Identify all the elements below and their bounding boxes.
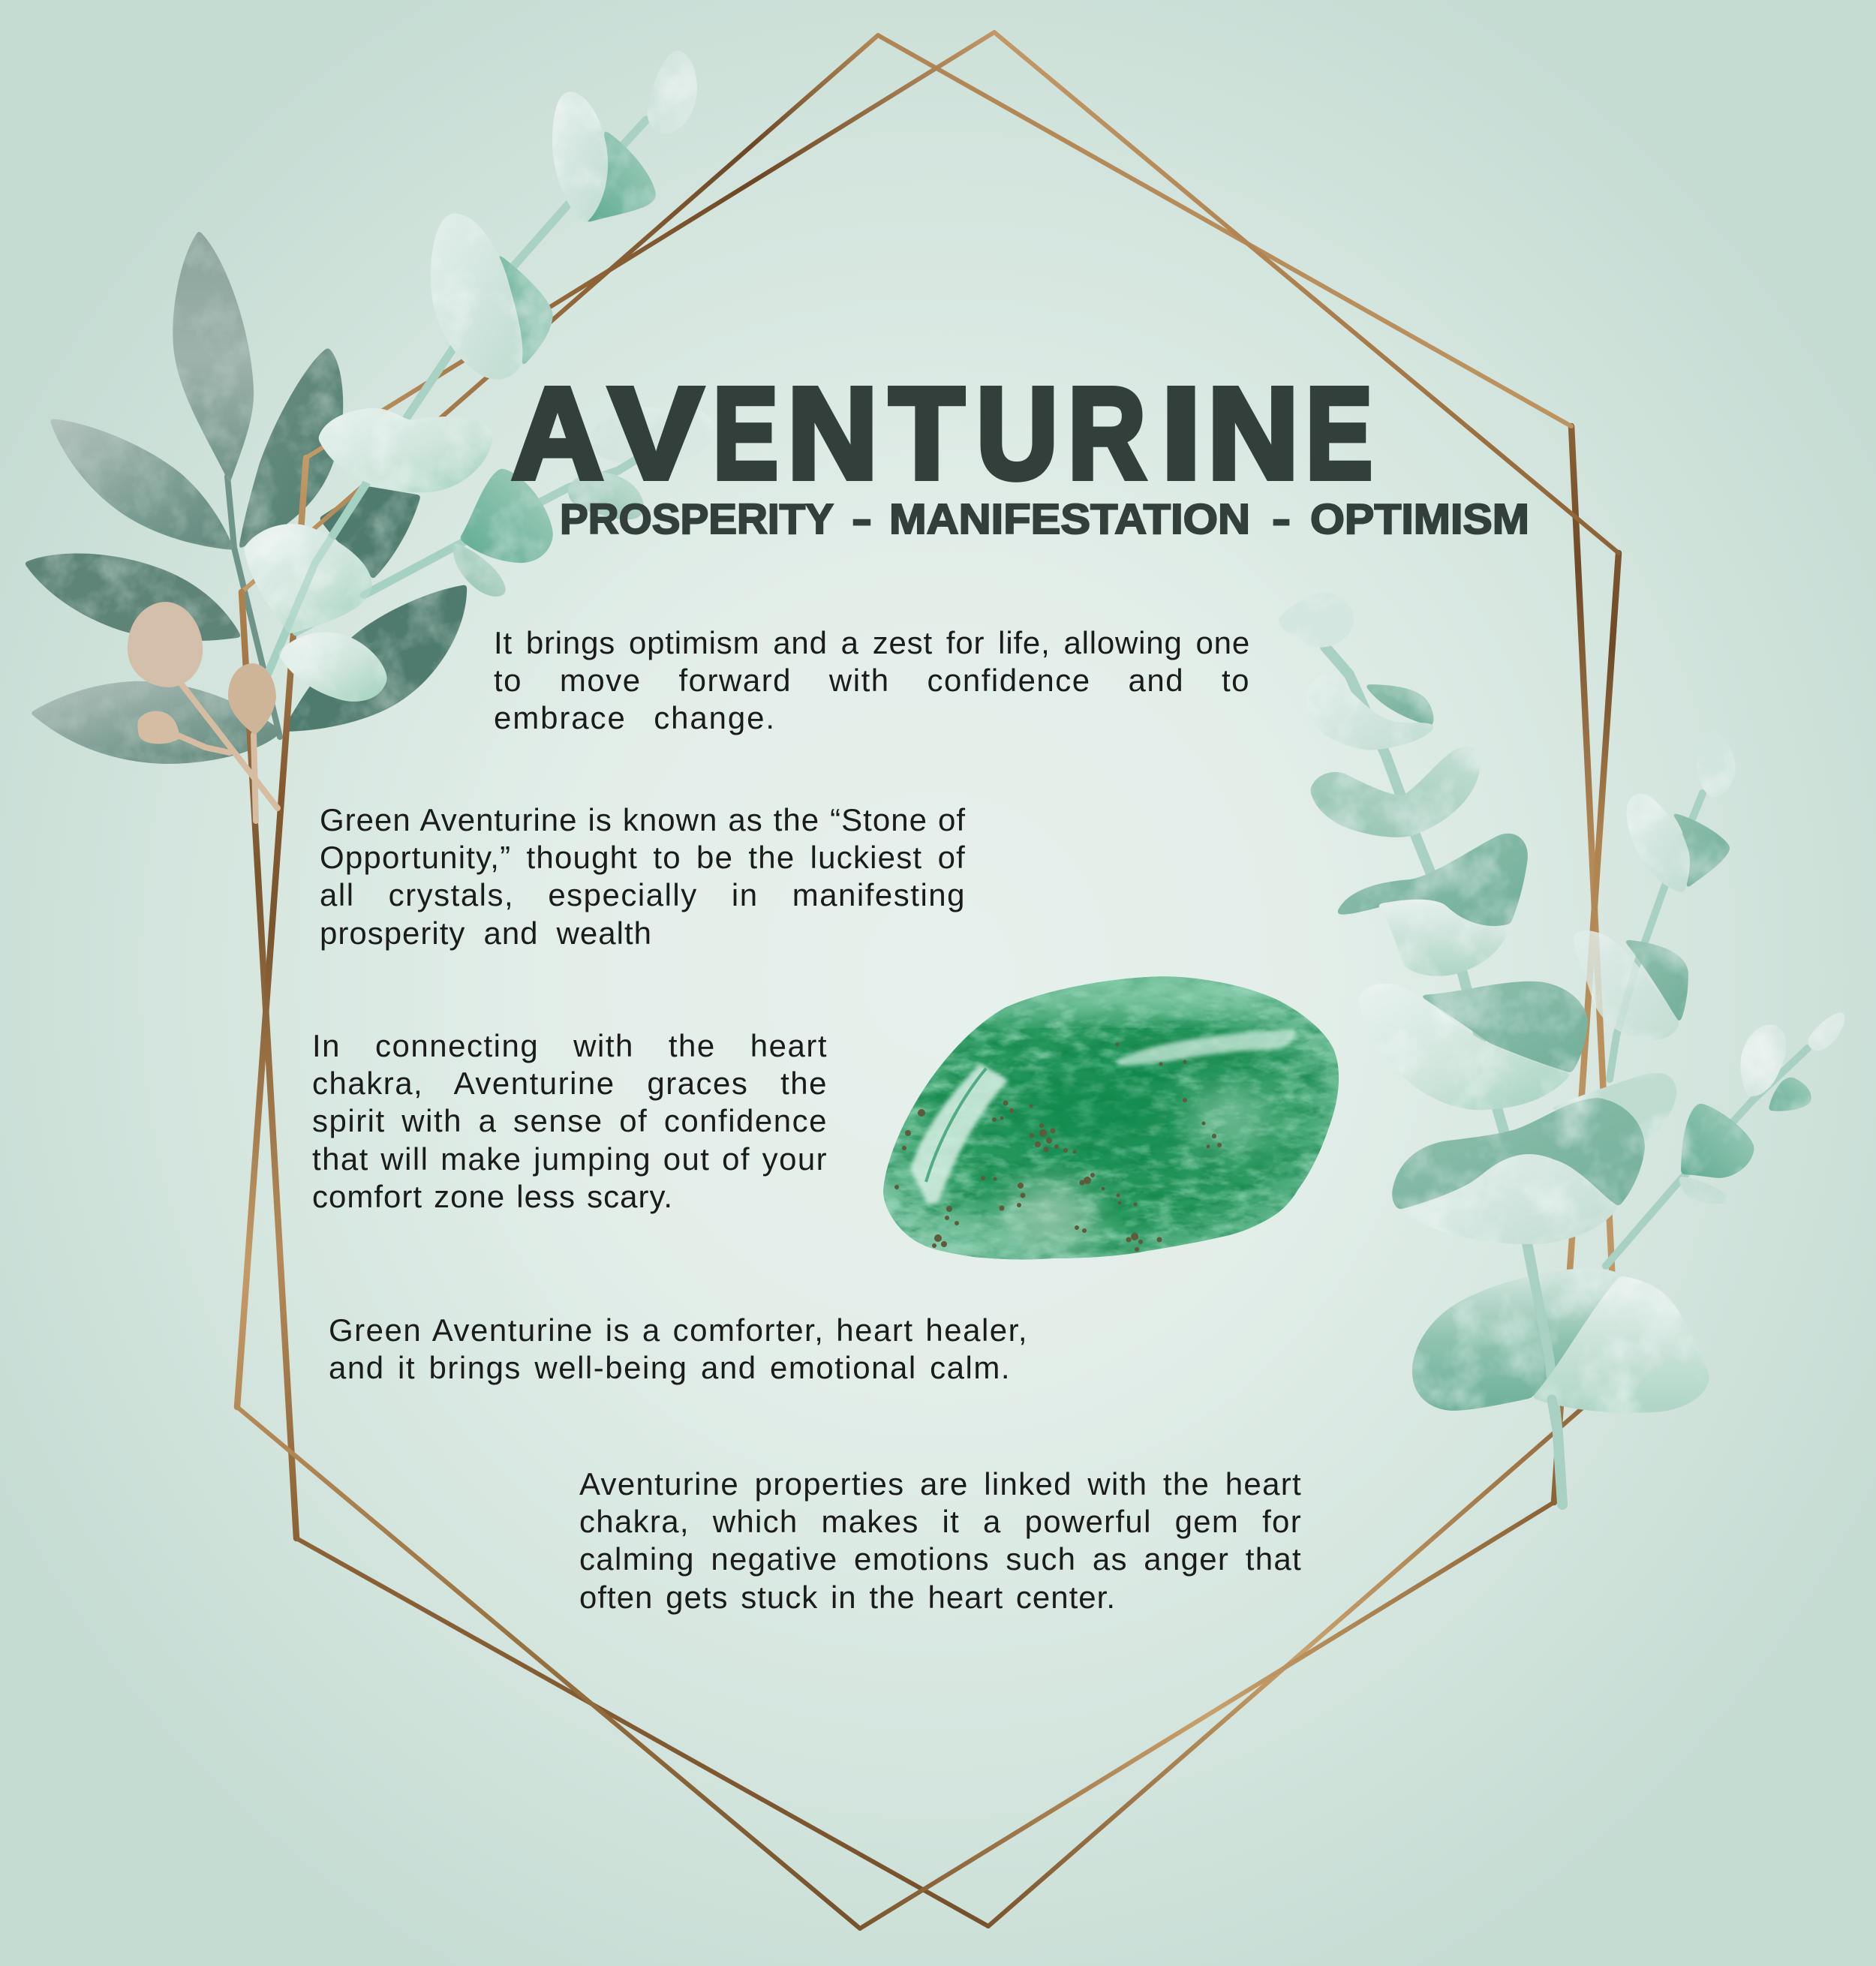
green aventurine gemstone — [883, 973, 1339, 1259]
leaf: tip — [648, 50, 697, 134]
subtitle: PROSPERITY — [560, 495, 834, 543]
leaf: fourth green — [1336, 834, 1528, 926]
pale eucalyptus branch, upper left — [244, 50, 715, 702]
leaf: third wing pair — [1310, 747, 1481, 837]
leaf: pale under mid green — [1679, 1176, 1731, 1204]
bud: large — [128, 602, 203, 687]
title: A — [512, 360, 603, 506]
text block: heart chakra confidence: chakra, Aventurine graces the — [312, 1066, 828, 1101]
subtitle: - — [852, 495, 872, 543]
text block: heart chakra confidence: In connecting with the heart — [312, 1028, 828, 1063]
text block: calming negative emotions: Aventurine properties are linked with the heart — [579, 1466, 1302, 1502]
leaf: top pale — [1278, 592, 1354, 648]
title: N — [1207, 360, 1299, 506]
branch stems — [268, 120, 646, 674]
leaf: fifth pale — [1358, 984, 1571, 1110]
text block: optimism: embrace change. — [494, 700, 776, 735]
text block: stone of opportunity: Opportunity,” thought to be the luckiest of — [320, 840, 966, 875]
leaf: small green — [1768, 1078, 1811, 1111]
leaf: green back 2 — [495, 251, 553, 368]
text block: calming negative emotions: often gets stuck in the heart center. — [579, 1580, 1116, 1615]
subtitle: MANIFESTATION — [889, 495, 1250, 543]
title: T — [889, 360, 964, 506]
text block: optimism: to move forward with confidence and to — [494, 663, 1250, 698]
bud: small — [137, 711, 179, 744]
pyrite speckles — [894, 1043, 1222, 1252]
title: I — [1161, 360, 1201, 506]
leaf: very pale pair — [1740, 1024, 1787, 1096]
leaf: pale behind lower — [1545, 1073, 1676, 1142]
text block: comforter: and it brings well-being and emotional calm. — [329, 1350, 1011, 1385]
leaf: fourth pale — [1377, 900, 1511, 976]
leaf: bottom grey-green — [30, 681, 282, 764]
leaf stem — [227, 476, 280, 737]
title: U — [976, 360, 1058, 506]
leaf: bottom pale — [1532, 1276, 1709, 1413]
leaf: bottom green — [1412, 1268, 1625, 1411]
title: E — [713, 360, 778, 506]
leaf: lower right dark — [282, 585, 467, 732]
subtitle: - — [1272, 495, 1291, 543]
leaf: pale top — [1626, 794, 1690, 893]
secondary stems — [1606, 793, 1808, 1266]
gold double hexagon frame — [237, 32, 1619, 1928]
leaf: green back 1 — [584, 129, 656, 224]
text block: heart chakra confidence: that will make jumping out of your — [312, 1141, 828, 1177]
text block: calming negative emotions: chakra, which makes it a powerful gem for — [579, 1504, 1302, 1539]
title: V — [609, 360, 702, 506]
leaf: pale under cluster — [452, 543, 506, 597]
text block: optimism: It brings optimism and a zest for life, allowing one — [494, 625, 1250, 660]
leaf: lower left dark — [24, 554, 242, 641]
leaf: upper right dark — [239, 347, 343, 549]
text block: stone of opportunity — [320, 802, 966, 951]
leaf: low pale — [278, 632, 387, 702]
text block: calming negative emotions — [579, 1466, 1302, 1615]
title: R — [1068, 360, 1146, 506]
gem shading and cloudy areas — [893, 973, 1298, 1258]
text block: optimism — [494, 625, 1250, 735]
leaf: green back middle — [1623, 939, 1688, 1024]
stem over the leaves — [268, 487, 452, 674]
main stem — [1325, 647, 1562, 1505]
text block: calming negative emotions: calming negative emotions such as anger that — [579, 1541, 1302, 1577]
text block: heart chakra confidence: comfort zone less scary. — [312, 1179, 673, 1214]
leaf: second pale — [1306, 674, 1435, 750]
text block: stone of opportunity: prosperity and wealth — [320, 915, 652, 951]
eucalyptus branches, right — [1278, 592, 1845, 1505]
leaf: behind centre — [319, 486, 421, 579]
beige buds — [128, 602, 278, 821]
leaf: green cluster right — [459, 468, 553, 563]
gem highlight: top band — [1116, 1030, 1296, 1066]
leaf: fifth green — [1418, 981, 1588, 1073]
stem tail — [1552, 1399, 1562, 1505]
text block: comforter — [329, 1312, 1028, 1385]
text block: heart chakra confidence — [312, 1028, 828, 1214]
leaf: top small — [1697, 730, 1736, 798]
text block: comforter: Green Aventurine is a comforter, heart healer, — [329, 1312, 1028, 1348]
gem highlight: left stripes — [910, 1064, 1009, 1204]
leaf: second green tip — [1364, 684, 1434, 726]
leaf: top grey — [173, 230, 254, 484]
title: E — [1306, 360, 1372, 506]
pale leaves behind the title — [588, 406, 715, 464]
leaf: far right pale tip — [1808, 1012, 1845, 1051]
bud: medium — [228, 663, 276, 735]
gem highlight stripe dark — [926, 1069, 986, 1182]
leaf: pale 1 — [552, 92, 608, 224]
text block: stone of opportunity: Green Aventurine is known as the “Stone of — [320, 802, 966, 837]
leaf: sixth green — [1392, 1098, 1645, 1210]
dark foliage on the left — [24, 230, 467, 764]
leaf: left grey — [50, 419, 234, 550]
text block: heart chakra confidence: spirit with a sense of confidence — [312, 1103, 828, 1138]
leaf: green back top — [1670, 812, 1730, 890]
leaf: pale middle — [1574, 930, 1679, 1040]
leaf: large pale centre — [244, 524, 372, 634]
title: N — [787, 360, 878, 506]
leaf: pale 2 — [431, 213, 523, 380]
subtitle: OPTIMISM — [1310, 495, 1529, 543]
small leaves near the title — [568, 472, 644, 520]
leaf: mid green — [1681, 1103, 1754, 1178]
bud stems — [158, 684, 278, 821]
leaf: sixth pale — [1399, 1154, 1619, 1244]
gem body — [883, 976, 1339, 1259]
stem across bottom leaf — [1528, 1247, 1553, 1396]
leaf: double pale — [318, 408, 493, 492]
text block: stone of opportunity: all crystals, especially in manifesting — [320, 877, 966, 912]
